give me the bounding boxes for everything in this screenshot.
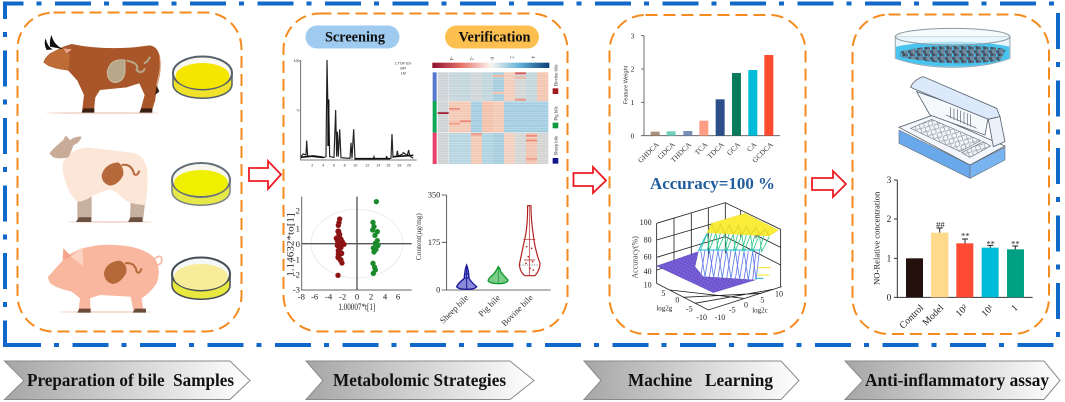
PCA score plot: -2 <box>293 269 300 279</box>
bar chart: feature weight: CA <box>745 140 759 154</box>
screening pill <box>306 26 400 48</box>
heatmap: Bovine bile <box>554 64 559 86</box>
chromatogram: 10 <box>353 164 357 168</box>
violin plot: 0 <box>436 286 440 295</box>
icon: sheep <box>49 135 154 223</box>
bar chart: feature weight: GCDCA <box>750 140 775 165</box>
heatmap: Pig bile <box>554 106 559 121</box>
bar chart: NO relative concentration: NO-Relative concentration <box>872 191 881 285</box>
3D accuracy surface: 60 <box>644 252 652 261</box>
chromatogram: 14 <box>376 164 380 168</box>
bar chart: feature weight: 2 <box>631 65 635 74</box>
panel: preparation of bile samples <box>18 12 242 332</box>
arrow: step 2 to step 3 <box>574 167 606 193</box>
PCA score plot: -4 <box>325 292 333 302</box>
panel: anti-inflammatory assay <box>852 14 1049 334</box>
3D accuracy surface: 5 <box>661 289 665 298</box>
heatmap: -2 <box>468 56 473 61</box>
panel: metabolomic strategies <box>284 14 568 332</box>
heatmap: 2 <box>509 56 514 59</box>
3D accuracy surface: Accuracy(%) <box>631 236 640 279</box>
PCA score plot: 2 <box>369 292 373 302</box>
3D accuracy surface: -10 <box>715 313 725 322</box>
verification pill: Verification <box>458 30 531 46</box>
heatmap: 0 <box>489 57 494 60</box>
3D accuracy surface: -5 <box>729 306 736 315</box>
bar chart: feature weight: Feature Weight <box>624 65 630 104</box>
bar chart: feature weight: TDCA <box>705 140 726 161</box>
chromatogram: 18 <box>397 164 401 168</box>
bar chart: feature weight: 3 <box>631 31 635 40</box>
chromatogram: 1:TOF ES- <box>395 62 413 66</box>
bar chart: NO relative concentration: 1 <box>1009 303 1021 314</box>
PCA score plot: 1.14632*to[1] <box>285 213 295 277</box>
3D accuracy surface: 5 <box>760 295 764 304</box>
PCA score plot <box>285 197 412 312</box>
violin plot: Bovine bile <box>499 293 535 328</box>
PCA score plot: 6 <box>396 292 401 302</box>
violin plot: 175 <box>428 238 440 247</box>
PCA score plot: 2 <box>296 205 300 215</box>
bar chart: NO relative concentration <box>872 176 1033 331</box>
3D accuracy surface: log2g <box>656 304 673 312</box>
PCA score plot: -8 <box>298 292 305 302</box>
bar chart: NO relative concentration: 10¹ <box>979 303 996 319</box>
bar chart: feature weight: GHDCA <box>636 140 661 165</box>
heatmap: 4 <box>530 56 535 59</box>
bar chart: feature weight: 0 <box>631 131 635 140</box>
icon: petri dish bovine bile <box>173 56 232 98</box>
3D accuracy surface: 40 <box>644 267 652 276</box>
chromatogram: LM <box>401 72 406 76</box>
PCA score plot: 0 <box>355 292 359 302</box>
PCA score plot: -6 <box>311 292 319 302</box>
3D accuracy surface: -5 <box>686 304 693 313</box>
stage label: preparation of bile samples: Preparation of bile Samples <box>27 370 234 390</box>
PCA score plot: -3 <box>293 285 300 295</box>
icon: petri dish sheep bile <box>172 163 230 205</box>
bar chart: NO relative concentration: ## <box>936 219 945 229</box>
stage label: anti-inflammatory assay: Anti-inflammatory assay <box>865 370 1049 390</box>
violin plot: Sheep bile <box>438 293 470 325</box>
chromatogram: BPI <box>400 67 406 71</box>
PCA score plot: 1.00007*t[1] <box>338 302 375 312</box>
3D accuracy surface: log2c <box>752 306 768 314</box>
3D accuracy surface: 10 <box>775 290 783 299</box>
chromatogram: 12 <box>365 164 369 168</box>
3D accuracy surface: 10 <box>644 281 652 290</box>
PCA score plot: 1 <box>296 223 300 233</box>
icon: microplate reader <box>899 77 1005 178</box>
bar chart: NO relative concentration: ** <box>1011 239 1020 249</box>
bar chart: feature weight: THDCA <box>669 140 694 164</box>
PCA score plot: 0 <box>296 239 300 249</box>
stage label: metabolomic strategies <box>306 361 534 400</box>
bar chart: feature weight: GCA <box>725 140 743 157</box>
stage label: machine learning <box>584 361 799 400</box>
bar chart: NO relative concentration: Control <box>897 302 926 331</box>
bar chart: NO relative concentration: ** <box>986 239 995 249</box>
violin plot: 350 <box>428 191 440 200</box>
heatmap: -4 <box>448 56 453 61</box>
chromatogram: 8 <box>344 164 346 168</box>
bar chart: feature weight: 1 <box>631 98 635 107</box>
3D accuracy surface: -10 <box>696 313 707 322</box>
chromatogram: 4 <box>322 164 324 168</box>
violin plot: Pig bile <box>476 293 502 319</box>
stage label: metabolomic strategies: Metabolomic Strategies <box>333 370 506 390</box>
chromatogram <box>294 59 417 168</box>
icon: bull <box>43 35 160 114</box>
3D accuracy surface: 0 <box>675 296 679 305</box>
arrow: step 3 to step 4 <box>812 171 846 197</box>
bar chart: NO relative concentration: 0 <box>887 293 892 303</box>
stage label: preparation of bile samples <box>4 361 250 400</box>
chromatogram: 16 <box>386 164 390 168</box>
panel: machine learning <box>610 15 806 334</box>
bar chart: NO relative concentration: 10² <box>954 303 971 319</box>
bar chart: feature weight: TCA <box>693 140 710 157</box>
icon: cell culture dish <box>895 28 1010 67</box>
bar chart: NO relative concentration: ** <box>961 230 970 240</box>
bar chart: NO relative concentration: 2 <box>887 215 892 225</box>
icon: pig <box>48 245 162 313</box>
heatmap: Sheep bile <box>554 136 559 155</box>
chromatogram: 6 <box>333 164 335 168</box>
heatmap <box>432 56 559 164</box>
bar chart: NO relative concentration: 1 <box>887 254 892 264</box>
stage label: anti-inflammatory assay <box>845 361 1060 400</box>
PCA score plot: -1 <box>293 254 300 264</box>
stage label: machine learning: Machine Learning <box>628 370 773 390</box>
screening pill: Screening <box>325 30 385 46</box>
3D accuracy surface: 80 <box>644 235 652 244</box>
3D accuracy surface: 100 <box>640 218 652 227</box>
bar chart: feature weight <box>624 31 780 165</box>
3D accuracy surface <box>631 203 783 322</box>
PCA score plot: -2 <box>339 292 346 302</box>
violin plot <box>414 191 551 328</box>
chromatogram: 2 <box>311 164 313 168</box>
bar chart: feature weight: GDCA <box>656 140 677 161</box>
bar chart: NO relative concentration: Model <box>920 302 946 328</box>
chromatogram: 20 <box>407 164 411 168</box>
3D accuracy surface: 0 <box>744 301 748 310</box>
accuracy heading: Accuracy=100 % <box>650 174 775 193</box>
violin plot: Content(μg/mg) <box>414 213 423 260</box>
bar chart: NO relative concentration: 3 <box>887 176 892 186</box>
chromatogram: % <box>296 109 300 113</box>
arrow: step 1 to step 2 <box>249 161 281 189</box>
PCA score plot: 4 <box>383 292 388 302</box>
chromatogram: 100 <box>294 59 300 63</box>
icon: petri dish pig bile <box>172 258 230 299</box>
verification pill <box>445 26 539 48</box>
